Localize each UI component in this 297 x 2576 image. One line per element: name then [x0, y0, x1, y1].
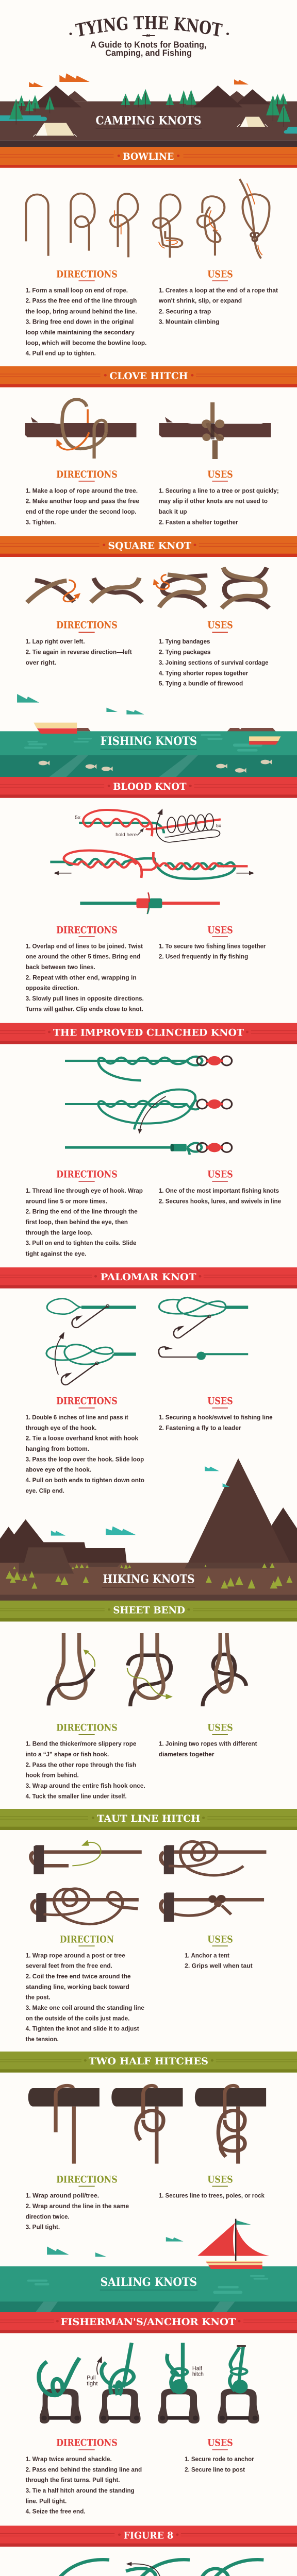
fish: [39, 759, 272, 773]
text: uses list: 2. Secure line to post: [185, 2466, 245, 2473]
text: directions list: through the large loop.: [26, 1229, 93, 1236]
banner: sailing knots: [0, 2219, 297, 2313]
banner heading: FISHING KNOTS: [101, 734, 197, 748]
section: clove hitch: [0, 366, 297, 526]
illustration: clove hitch left: [25, 399, 136, 459]
heading: directions: DIRECTIONS: [56, 2174, 118, 2185]
heading: directions: [56, 1722, 118, 1735]
ground: [0, 1563, 297, 1601]
text: directions list: Turns will gather. Clip ends close to knot.: [26, 1006, 143, 1013]
water ripples: [27, 2275, 268, 2294]
section: taut line hitch: [0, 1840, 297, 2073]
text: uses list: diameters together: [159, 1751, 214, 1758]
section: improved clinched knot: [0, 1023, 297, 1289]
ground: [0, 86, 297, 147]
subtitle: A Guide to Knots for Boating,: [90, 39, 206, 49]
arrow: pass over hook: [55, 1332, 64, 1375]
text: directions list: [26, 943, 144, 1013]
illustration: two half hitches step 2: [111, 2086, 183, 2164]
text: directions list: [26, 1414, 144, 1494]
label: half hitch: Half: [192, 2366, 203, 2372]
text: directions list: hanging from bottom.: [26, 1446, 89, 1452]
text: directions list: 2. Bring the end of the line through the: [26, 1208, 138, 1215]
band: sheet bend: SHEET BEND: [113, 1605, 185, 1616]
sailboat: [197, 2219, 269, 2269]
heading: uses: USES: [207, 469, 233, 480]
text: directions list: 4. Pull end up to tighten.: [26, 350, 96, 357]
water ripples: [24, 734, 262, 752]
water: [0, 2266, 297, 2313]
water: [0, 115, 297, 133]
text: directions list: direction twice.: [26, 2213, 70, 2220]
text: uses list: back it up: [159, 509, 187, 515]
heading: uses: USES: [207, 2437, 233, 2448]
text: uses list: 2. Tying packages: [159, 649, 210, 655]
heading: uses: USES: [207, 1396, 233, 1406]
text: uses list: 2. Securing a trap: [159, 308, 211, 315]
text: uses list: 1. Secure rode to anchor: [185, 2456, 254, 2463]
band: figure 8: [0, 2526, 297, 2547]
mountains: [0, 1459, 297, 1568]
text: uses list: [159, 638, 269, 687]
heading: directions: DIRECTIONS: [56, 2437, 118, 2448]
text: directions list: 2. Pass the free end of the line through: [26, 297, 137, 304]
flock shapes: [17, 694, 144, 715]
text: uses list: may slip if other knots are not used to: [159, 498, 268, 505]
illustration: clove hitch right: [159, 402, 271, 459]
boat left hull: [37, 728, 77, 734]
text: directions list: 3. Pass the loop over the hook. Slide loop: [26, 1456, 144, 1463]
text: directions list: [26, 487, 139, 526]
heading: uses: USES: [207, 1722, 233, 1733]
banner heading: SAILING KNOTS: [101, 2276, 197, 2289]
section: sheet bend: [0, 1563, 297, 1830]
text: directions list: [26, 1188, 143, 1257]
swivel: [197, 1143, 232, 1152]
heading: uses: USES: [207, 924, 233, 936]
illustration: taut line step 3: [32, 1889, 139, 1924]
heading: directions: DIRECTIONS: [56, 1169, 118, 1180]
text: directions list: opposite direction.: [26, 985, 79, 992]
labels: 5x and hold here: [75, 815, 221, 838]
illustration: palomar finished: [159, 1346, 248, 1360]
swivel: [197, 1099, 232, 1109]
text: directions list: 1. Overlap end of lines to be joined. Twist: [26, 943, 143, 950]
heading: directions: DIRECTIONS: [56, 620, 118, 631]
section: two half hitches: [0, 2086, 297, 2333]
text: directions list: over right.: [26, 659, 56, 666]
illustration: blood knot finished: [80, 892, 220, 914]
text: directions list: 3. Tighten.: [26, 519, 56, 526]
band: sheet bend: [0, 1601, 297, 1621]
illustration: sheet bend step 2: [127, 1633, 173, 1706]
text: directions list: 3. Slowly pull lines in opposite directions.: [26, 995, 144, 1002]
text: directions list: 2. Make another loop and pass the free: [26, 498, 139, 505]
text: directions list: 1. Bend the thicker/more slippery rope: [26, 1740, 136, 1748]
labels: pull tight: [87, 2356, 102, 2387]
heading rule: [101, 749, 197, 750]
orange arrows: [63, 574, 169, 602]
illustration: figure 8 step 1: [34, 2560, 109, 2576]
illustration: blood knot step 1: [79, 809, 221, 842]
illustration: bowline steps: [26, 179, 269, 259]
text: directions list: [26, 1952, 144, 2043]
section: square knot: [0, 536, 297, 777]
text: uses list: 2. Fasten a shelter together: [159, 519, 238, 526]
text: directions list: the tension.: [26, 2036, 59, 2043]
text: directions list: 1. Wrap rope around a post or tree: [26, 1952, 125, 1959]
text: directions list: loop while maintaining the secondary: [26, 329, 135, 336]
illustration: shackle step 3: [158, 2343, 200, 2424]
illustration: figure 8 step 3: [182, 2560, 263, 2576]
text: directions list: through eye of the hook.: [26, 1425, 96, 1431]
band: figure 8: FIGURE 8: [124, 2530, 173, 2541]
title block: [69, 16, 229, 58]
illustration: palomar step 3: [46, 1345, 136, 1385]
heading: uses: USES: [207, 1169, 233, 1180]
illustration: palomar step 2: [159, 1297, 248, 1338]
icon: small knot: [142, 34, 155, 37]
text: directions list: 2. Repeat with other end, wrapping in: [26, 974, 137, 981]
section: palomar knot: [0, 1297, 297, 1568]
heading: directions: [56, 2437, 118, 2450]
band: taut line hitch: [0, 1809, 297, 1830]
text: uses list: 4. Tying shorter ropes together: [159, 670, 248, 676]
arrows: pull directions: [54, 871, 254, 875]
band: improved clinched knot: THE IMPROVED CLINCHED KNOT: [53, 1027, 244, 1038]
band: fisherman's anchor knot: [0, 2312, 297, 2333]
text: directions list: standing line, working back toward: [26, 1984, 129, 1990]
band: clove hitch: CLOVE HITCH: [109, 370, 188, 382]
text: directions list: [26, 2456, 142, 2515]
band: square knot: SQUARE KNOT: [108, 540, 192, 551]
text: uses list: 5. Tying a bundle of firewood: [159, 680, 243, 687]
text: directions list: 4. Seize the free end.: [26, 2508, 86, 2515]
illustration: shackle step 1: [39, 2358, 81, 2424]
text: directions list: 1. Double 6 inches of line and pass it: [26, 1414, 128, 1421]
text: uses list: 1. Joining two ropes with different: [159, 1740, 257, 1748]
text: directions list: the loop, bring around behind the line.: [26, 308, 137, 315]
text: directions list: 1. Lap right over left.: [26, 638, 85, 645]
band: blood knot: BLOOD KNOT: [113, 781, 187, 792]
labels: 5x and hold here: 5x: [75, 815, 80, 821]
text: uses list: 1. Securing a hook/swivel to fishing line: [159, 1414, 273, 1421]
banner: hiking mountains: [0, 1459, 297, 1568]
band: palomar knot: PALOMAR KNOT: [101, 1272, 196, 1283]
illustration: clinched step 2: [65, 1090, 199, 1129]
section: fisherman's anchor knot: [0, 2343, 297, 2576]
band: square knot: [0, 536, 297, 557]
text: uses list: 1. Tying bandages: [159, 638, 210, 645]
heading: uses: [207, 2437, 233, 2450]
text: uses list: 1. To secure two fishing lines together: [159, 943, 266, 950]
text: directions list: 1. Wrap twice around shackle.: [26, 2456, 112, 2463]
text: directions list: 1. Make a loop of rope around the tree.: [26, 487, 138, 494]
heading: directions: DIRECTIONS: [56, 1722, 118, 1733]
water: [0, 731, 297, 777]
band: taut line hitch: TAUT LINE HITCH: [97, 1813, 200, 1824]
illustration: sheet bend step 3: [203, 1633, 246, 1706]
text: directions list: 1. Form a small loop on end of rope.: [26, 287, 128, 294]
illustration: two half hitches step 1: [28, 2086, 100, 2164]
bowline knot center: [251, 233, 259, 241]
illustration: clinched step 1: [65, 1057, 202, 1080]
text: directions list: [26, 287, 146, 357]
text: directions list: eye. Clip end.: [26, 1487, 64, 1494]
text: uses list: [158, 287, 278, 326]
trees: [6, 1563, 292, 1589]
illustration: taut line step 1: [31, 1840, 142, 1874]
illustration: taut line finished: [161, 1892, 264, 1922]
text: directions list: 3. Bring free end down in the original: [26, 318, 134, 326]
text: directions list: 4. Pull on both ends to tighten down onto: [26, 1477, 144, 1484]
flock shapes: [51, 1466, 229, 1536]
text: uses list: [159, 487, 279, 526]
text: directions list: 3. Pull tight.: [26, 2224, 60, 2231]
boat right: [249, 736, 280, 744]
illustration: blood knot step 2: [50, 851, 248, 879]
illustration: square knot steps: [27, 567, 269, 608]
text: directions list: several feet from the free end.: [26, 1962, 112, 1970]
labels: 5x and hold here: hold here: [116, 832, 137, 838]
text: directions list: the post.: [26, 1994, 51, 2001]
text: directions list: 4. Tuck the smaller line under itself.: [26, 1793, 127, 1800]
text: uses list: [159, 1740, 257, 1758]
labels: pull tight: tight: [87, 2381, 98, 2387]
text: uses list: [185, 2456, 254, 2473]
banner: fishing knots: [0, 694, 297, 777]
labels: 5x and hold here: 5x: [216, 823, 221, 828]
illustration: figure 8 step 2: [115, 2560, 190, 2576]
section: bowline: [0, 147, 297, 357]
heading: uses: USES: [207, 1934, 233, 1945]
text: uses list: won't shrink, slip, or expand: [158, 297, 242, 304]
heading: uses: USES: [207, 620, 233, 631]
heading: directions: DIRECTIONS: [56, 924, 118, 936]
tent small: [237, 117, 268, 127]
arrow: thread direction: [138, 1096, 166, 1134]
hills right: [226, 728, 276, 732]
tree trunks: [16, 93, 284, 127]
section: blood knot: [0, 777, 297, 1013]
text: uses list: 1. One of the most important fishing knots: [159, 1188, 279, 1194]
text: directions list: [26, 638, 132, 666]
illustration: sheet bend step 1: [48, 1633, 95, 1705]
text: directions list: above eye of the hook.: [26, 1466, 91, 1473]
heading: uses: USES: [207, 268, 233, 280]
illustration: shackle step 4: [218, 2345, 259, 2424]
trees: [9, 89, 290, 122]
text: directions list: through the first turns. Pull tight.: [26, 2477, 120, 2484]
illustration: shackle step 2: [99, 2343, 141, 2424]
band: bowline: BOWLINE: [123, 151, 174, 162]
text: directions list: first loop, then behind the eye, then: [26, 1219, 128, 1226]
illustration: two half hitches step 3: [195, 2086, 266, 2164]
heading: directions: DIRECTIONS: [56, 469, 118, 480]
text: directions list: 2. Tie a loose overhand knot with hook: [26, 1435, 139, 1442]
text: directions list: loop, which will become the bowline loop.: [26, 340, 146, 346]
mountains: [38, 86, 270, 107]
label: half hitch: hitch: [192, 2371, 204, 2377]
text: uses list: 2. Secures hooks, lures, and swivels in line: [159, 1198, 281, 1205]
labels: pull tight: Pull: [87, 2375, 96, 2381]
orange arrows: [114, 183, 262, 255]
flock shapes: [47, 2237, 184, 2257]
illustration: palomar step 1: [47, 1299, 136, 1328]
text: uses list: 1. Secures line to trees, poles, or rock: [159, 2192, 265, 2199]
text: uses list: [185, 1952, 253, 1970]
illustration: taut line step 2: [161, 1841, 266, 1875]
text: uses list: 1. Securing a line to a tree or post quickly;: [159, 487, 279, 494]
text: uses list: 2. Fastening a fly to a leader: [159, 1425, 241, 1431]
flock shapes: [29, 73, 249, 87]
text: directions list: 2. Wrap around the line in the same: [26, 2203, 129, 2210]
text: uses list: 1. Creates a loop at the end of a rope that: [159, 287, 278, 294]
heading: uses: USES: [207, 2174, 233, 2185]
banner: hiking knots: [0, 1563, 297, 1601]
band: improved clinched knot: [0, 1023, 297, 1044]
label: half hitch: [192, 2366, 204, 2377]
text: uses list: 3. Joining sections of survival cordage: [159, 659, 269, 666]
text: directions list: [26, 2192, 129, 2231]
text: directions list: 3. Pull on end to tighten the coils. Slide: [26, 1240, 136, 1247]
band: blood knot: [0, 777, 297, 798]
text: uses list: [159, 943, 266, 960]
band: bowline: [0, 147, 297, 168]
text: directions list: 2. Tie again in reverse direction—left: [26, 649, 132, 655]
band: two half hitches: [0, 2052, 297, 2073]
text: uses list: 2. Used frequently in fly fishing: [159, 953, 248, 960]
banner heading: HIKING KNOTS: [103, 1573, 195, 1586]
swivel: [197, 1056, 232, 1065]
heading rule: [100, 2290, 197, 2291]
text: directions list: 2. Pass the other rope through the fish: [26, 1761, 136, 1768]
band: palomar knot: [0, 1267, 297, 1289]
text: uses list: 2. Grips well when taut: [185, 1962, 253, 1970]
heading: directions: DIRECTIONS: [56, 1396, 118, 1406]
band: clove hitch: [0, 366, 297, 387]
band: two half hitches: TWO HALF HITCHES: [89, 2056, 208, 2067]
illustration: clinched finished: [65, 1143, 202, 1155]
text: directions list: line. Pull tight.: [26, 2498, 67, 2504]
text: directions list: hook from behind.: [26, 1772, 79, 1778]
text: directions list: back between two lines.: [26, 964, 95, 971]
text: directions list: [26, 1740, 145, 1800]
text: directions list: 3. Wrap around the entire fish hook once.: [26, 1783, 145, 1789]
text: directions list: around line 5 or more times.: [26, 1198, 107, 1205]
text: directions list: into a “J” shape or fish hook.: [26, 1751, 109, 1758]
text: directions list: 1. Wrap around poll/tree.: [26, 2192, 99, 2199]
text: directions list: one around the other 5 times. Bring end: [26, 953, 140, 960]
text: uses list: 1. Anchor a tent: [185, 1952, 230, 1959]
band: fisherman's anchor knot: FISHERMAN'S/ANCHOR KNOT: [61, 2316, 236, 2328]
text: directions list: on the outside of the coils just made.: [26, 2015, 129, 2022]
text: directions list: 1. Thread line through eye of hook. Wrap: [26, 1188, 143, 1194]
text: directions list: 3. Tie a half hitch around the standing: [26, 2487, 135, 2494]
text: directions list: end of the rope under the second loop.: [26, 509, 136, 515]
text: directions list: 2. Coil the free end twice around the: [26, 1973, 130, 1980]
heading: direction: DIRECTION: [60, 1934, 114, 1945]
banner: camping knots: [0, 73, 297, 147]
boat left: [34, 723, 91, 731]
text: uses list: [159, 1414, 273, 1431]
bowline directions: [26, 268, 278, 357]
heading: directions: [56, 620, 118, 633]
title dots: [69, 32, 229, 35]
tent large: [33, 123, 77, 137]
text: directions list: tight against the eye.: [26, 1250, 87, 1257]
heading: directions: DIRECTIONS: [56, 268, 118, 280]
text: directions list: 4. Tighten the knot and slide it to adjust: [26, 2025, 139, 2032]
text: directions list: 3. Make one coil around the standing line: [26, 2005, 144, 2011]
banner heading: CAMPING KNOTS: [96, 114, 201, 127]
title text: TYING THE KNOT: [75, 16, 223, 37]
subtitle: Camping, and Fishing: [105, 47, 192, 58]
text: uses list: [159, 1188, 281, 1205]
text: uses list: 3. Mountain climbing: [159, 318, 219, 326]
text: directions list: 2. Pass end behind the standing line and: [26, 2466, 142, 2473]
